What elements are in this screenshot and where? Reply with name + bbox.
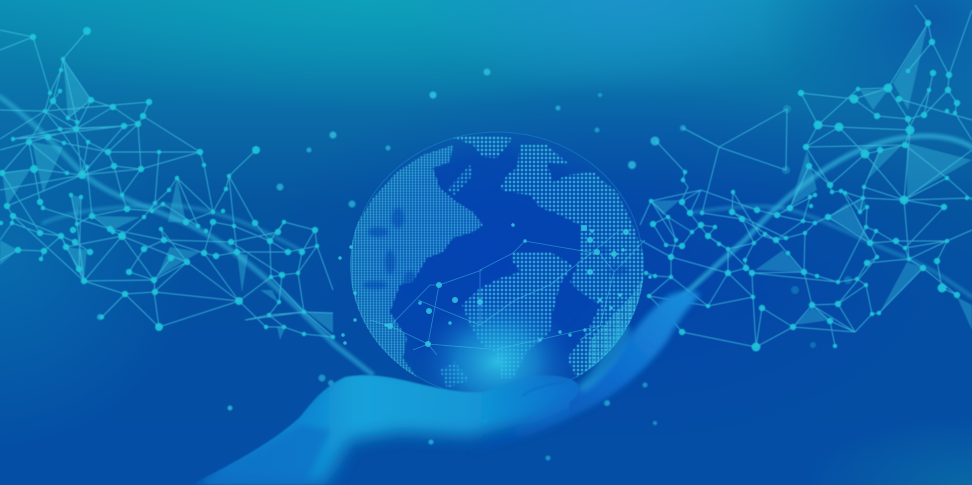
connection lines left <box>0 30 333 337</box>
nodes left large <box>34 31 256 327</box>
palm and arm <box>196 374 578 485</box>
arm base fill <box>200 425 330 485</box>
globe sphere <box>350 131 644 399</box>
translucent triangles left <box>0 59 333 340</box>
network: right cluster <box>640 5 972 347</box>
nodes right medium <box>653 23 957 332</box>
nodes left medium <box>2 37 315 294</box>
nodes right large <box>666 88 942 347</box>
globe limb highlight <box>351 132 643 398</box>
network lines and nodes over globe <box>340 225 650 355</box>
translucent triangles right <box>650 23 972 330</box>
right fingers behind globe <box>470 291 700 452</box>
nodes right small <box>646 71 967 346</box>
globe continents <box>345 135 648 388</box>
globe <box>338 132 652 393</box>
nodes left small <box>1 59 333 337</box>
network: left cluster <box>0 30 333 340</box>
globe bottom glow <box>417 296 577 428</box>
finger highlight on globe side <box>575 325 630 392</box>
background bokeh dots <box>97 68 866 460</box>
mottling on left landmass <box>363 208 628 299</box>
hand holding the globe <box>190 291 700 485</box>
connection lines right <box>640 5 972 347</box>
thumb crease <box>522 382 566 396</box>
light wave ribbons <box>0 97 972 374</box>
